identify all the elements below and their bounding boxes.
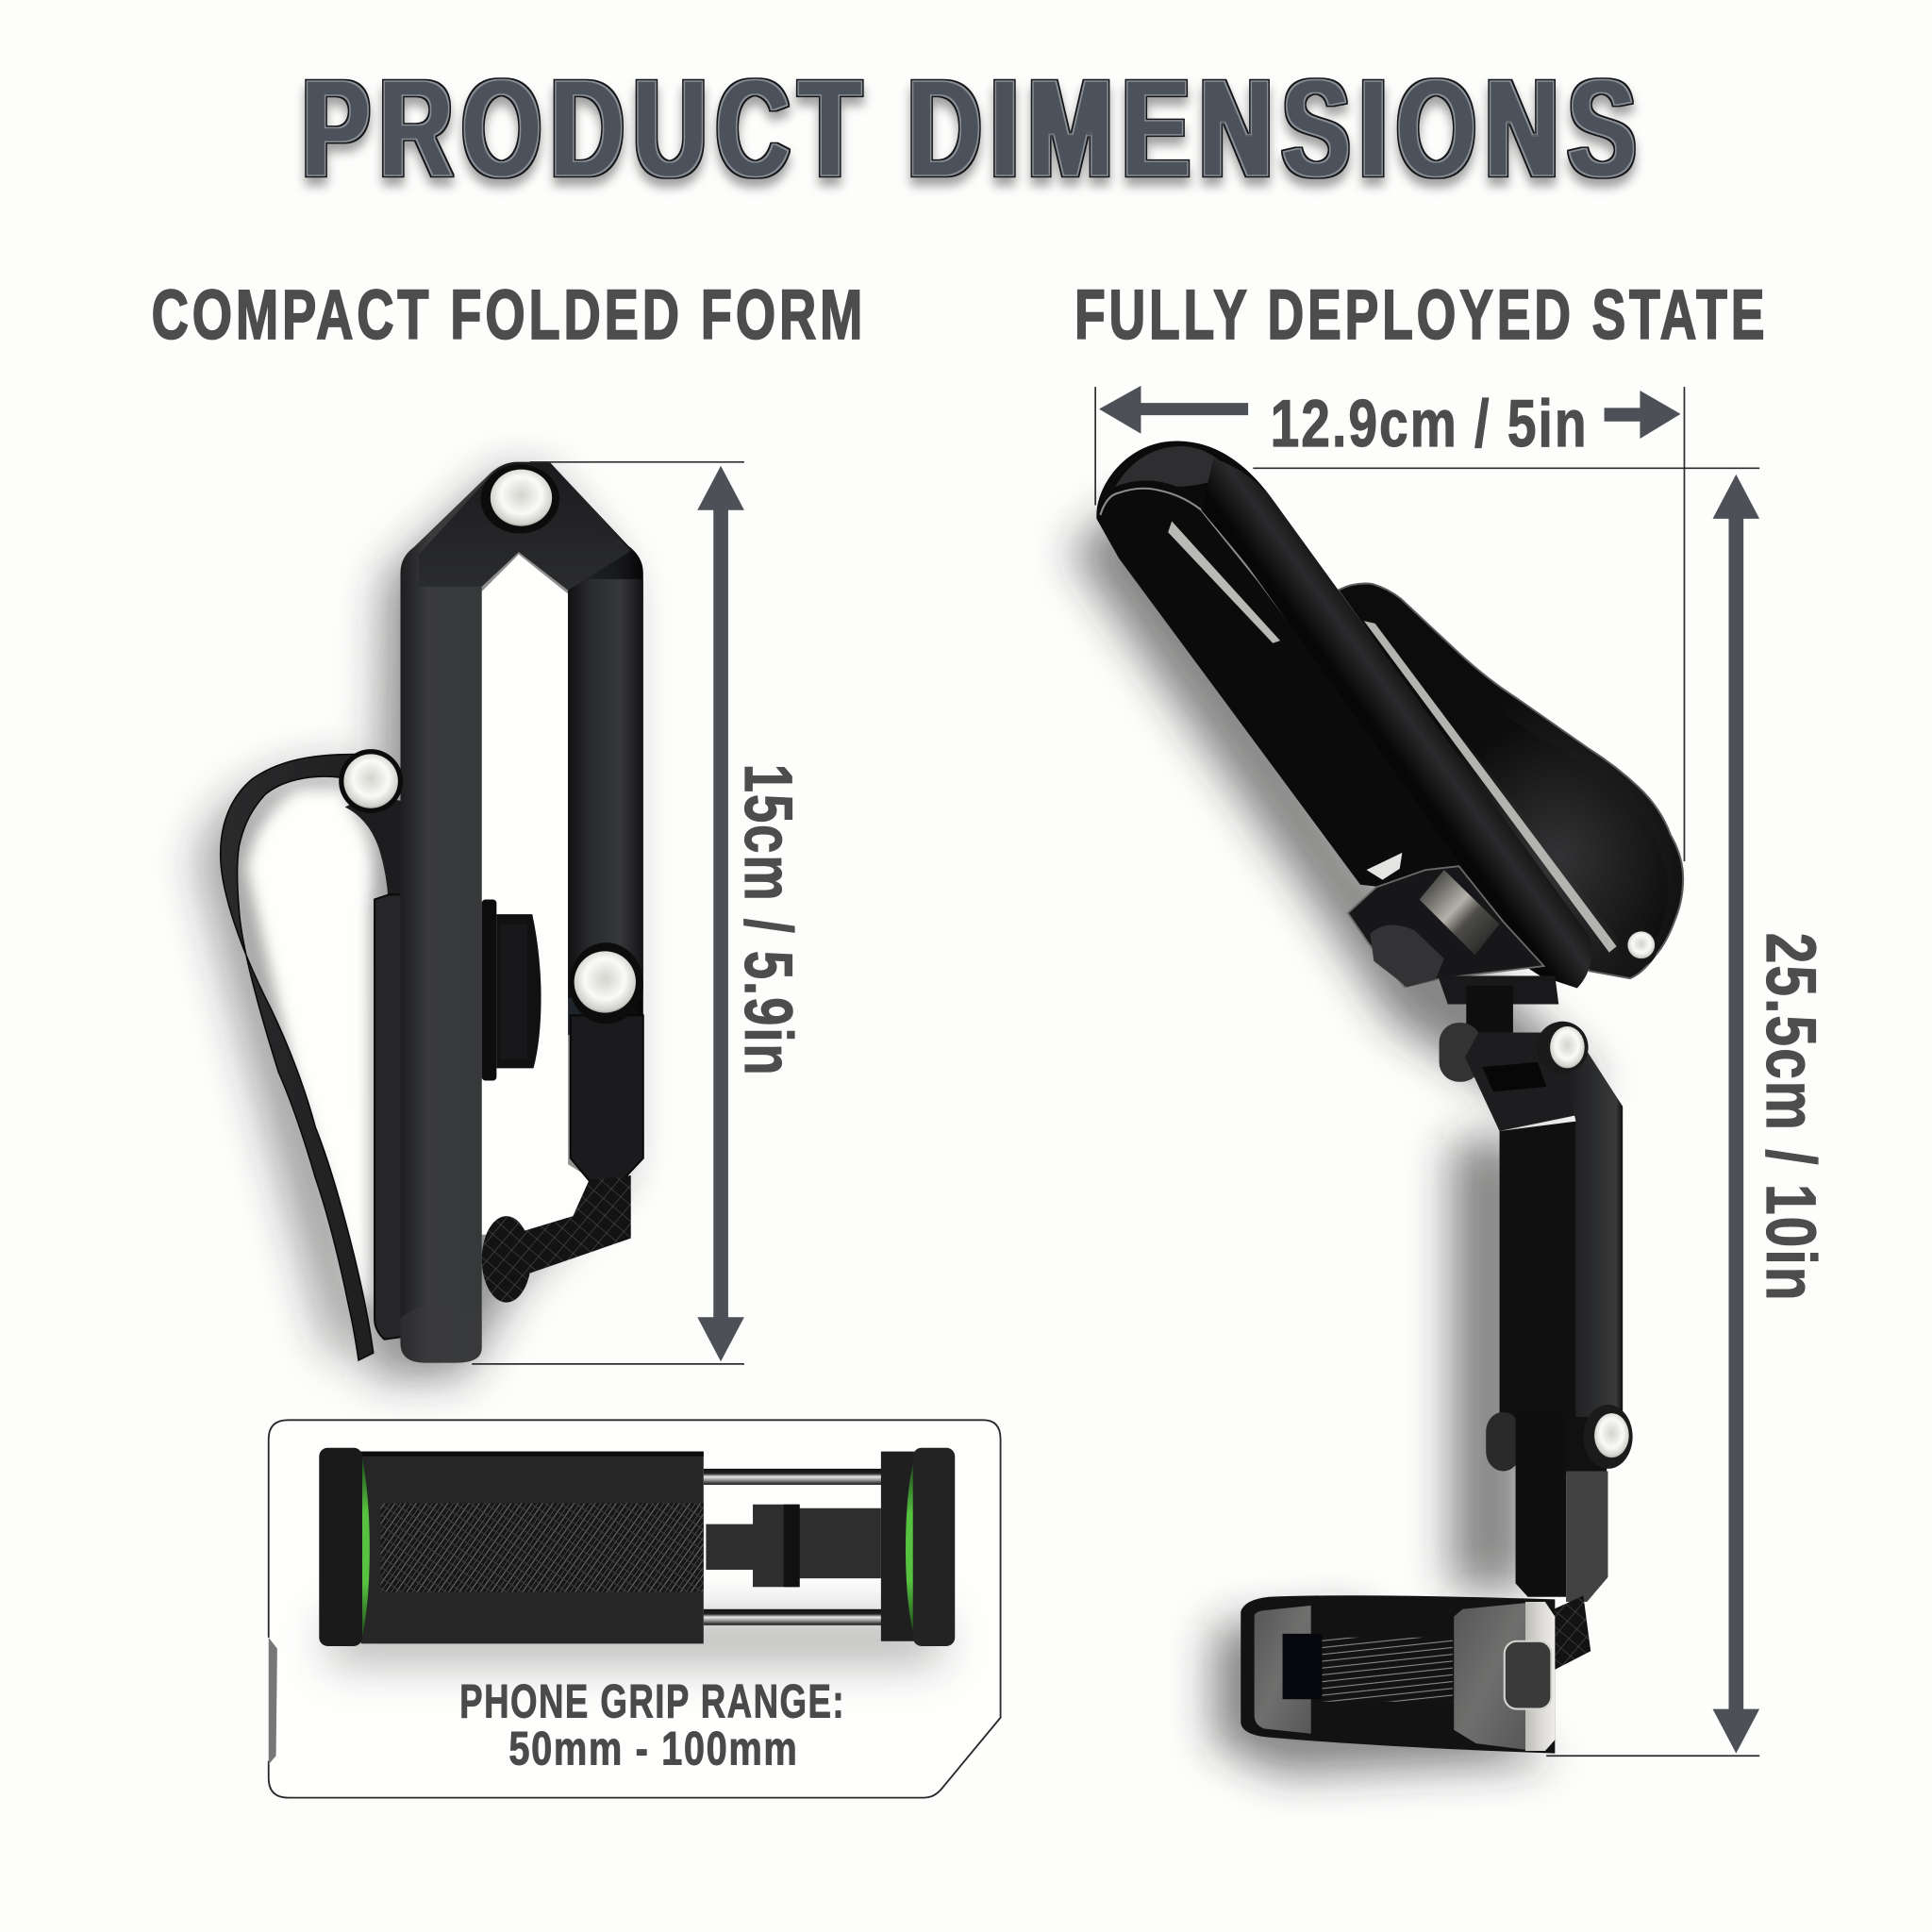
right grey jaw xyxy=(1454,1603,1525,1750)
deployed height dimension xyxy=(1713,475,1830,1754)
ball joint xyxy=(482,1216,531,1303)
pin: top xyxy=(480,464,559,534)
panel: phone grip range xyxy=(269,1420,1001,1798)
chrome end xyxy=(1525,1602,1555,1751)
height arrow xyxy=(1713,475,1759,1754)
hinge roller xyxy=(1440,1023,1481,1082)
right grip block xyxy=(881,1452,914,1641)
visor head and panel xyxy=(1096,441,1541,975)
pin: lower xyxy=(569,942,643,1024)
lower pin xyxy=(1583,1405,1633,1469)
joint thumb knob xyxy=(1370,924,1444,987)
width extension lines xyxy=(1095,387,1759,1756)
hinge collar xyxy=(1465,1033,1577,1131)
knurled link xyxy=(1554,1595,1591,1670)
folded height dimension xyxy=(472,462,806,1364)
lower right arm xyxy=(571,1015,643,1180)
main grip body xyxy=(361,1452,704,1643)
back plate xyxy=(375,894,402,1340)
grip top edge xyxy=(361,1452,704,1457)
left green strip xyxy=(362,1458,370,1637)
visor blade highlight xyxy=(1168,521,1280,643)
grip range label: PHONE GRIP RANGE: xyxy=(459,1675,845,1728)
height label: 15cm / 5.9in xyxy=(730,764,806,1077)
width arrow: left xyxy=(1099,386,1248,434)
elbow pin xyxy=(1537,1022,1589,1074)
folded mount illustration xyxy=(197,462,643,1377)
grey plate xyxy=(1566,1472,1607,1602)
left grey jaw xyxy=(1255,1606,1311,1734)
deployed mount illustration xyxy=(1070,441,1683,1774)
spring clip band xyxy=(221,754,374,1360)
top hinge block xyxy=(419,462,631,591)
rear pin xyxy=(1618,928,1657,967)
deployed width dimension xyxy=(1095,386,1759,1756)
slot xyxy=(1283,1634,1322,1699)
arm body xyxy=(1500,1122,1576,1429)
collar slot xyxy=(1482,1062,1546,1091)
extension lines xyxy=(472,462,744,1364)
arm elbow xyxy=(1555,1035,1623,1429)
width arrow: right xyxy=(1605,391,1681,439)
lower bracket xyxy=(1562,1417,1607,1474)
clip interior highlight xyxy=(246,789,373,1306)
small silver stud xyxy=(1366,853,1402,880)
height label: 25.5cm / 10in xyxy=(1752,933,1830,1303)
frame opening xyxy=(482,555,594,1235)
right arm xyxy=(568,579,643,998)
visor head gloss xyxy=(1115,446,1232,487)
slider xyxy=(706,1505,881,1587)
visor rim highlight xyxy=(1100,489,1425,805)
knurled bracket xyxy=(524,1175,631,1275)
knurled pad xyxy=(381,1503,704,1592)
bottom bar end xyxy=(400,1306,482,1363)
grip range label xyxy=(459,1675,845,1774)
slider groove xyxy=(784,1505,800,1587)
deployed mount shadows xyxy=(1070,492,1602,1774)
end knob xyxy=(1505,1641,1551,1709)
left grip cap xyxy=(319,1448,362,1646)
upper hinge bar xyxy=(1466,986,1513,1047)
heading: compact folded form: COMPACT FOLDED FORM xyxy=(152,275,866,354)
height arrow xyxy=(697,466,744,1361)
right grip cap xyxy=(913,1448,955,1646)
phone grip body xyxy=(1241,1595,1555,1754)
visor tube xyxy=(1201,458,1591,989)
folded frame xyxy=(400,462,643,1363)
panel outline xyxy=(269,1420,1001,1798)
rear plate silver strip xyxy=(1364,621,1617,953)
rods xyxy=(704,1469,883,1625)
right green strip xyxy=(906,1464,913,1631)
grip range label: 50mm - 100mm xyxy=(508,1722,798,1774)
width label: 12.9cm / 5in xyxy=(1271,386,1589,460)
folded mount shadow xyxy=(197,475,623,1377)
lower strap xyxy=(1516,1405,1566,1597)
rear plate recess xyxy=(1380,628,1668,946)
mount knob xyxy=(482,899,541,1080)
panel left edge xyxy=(269,1638,277,1764)
grip shadow xyxy=(330,1617,941,1663)
hex joint xyxy=(1348,866,1544,987)
rear visor plate xyxy=(1338,584,1683,978)
pin: clip xyxy=(339,749,403,813)
clip arm xyxy=(345,794,402,899)
lower roller xyxy=(1486,1412,1521,1472)
joint chrome cylinder xyxy=(1420,870,1500,955)
ribbed strap xyxy=(1322,1638,1453,1702)
hinge ears xyxy=(1438,975,1558,1004)
